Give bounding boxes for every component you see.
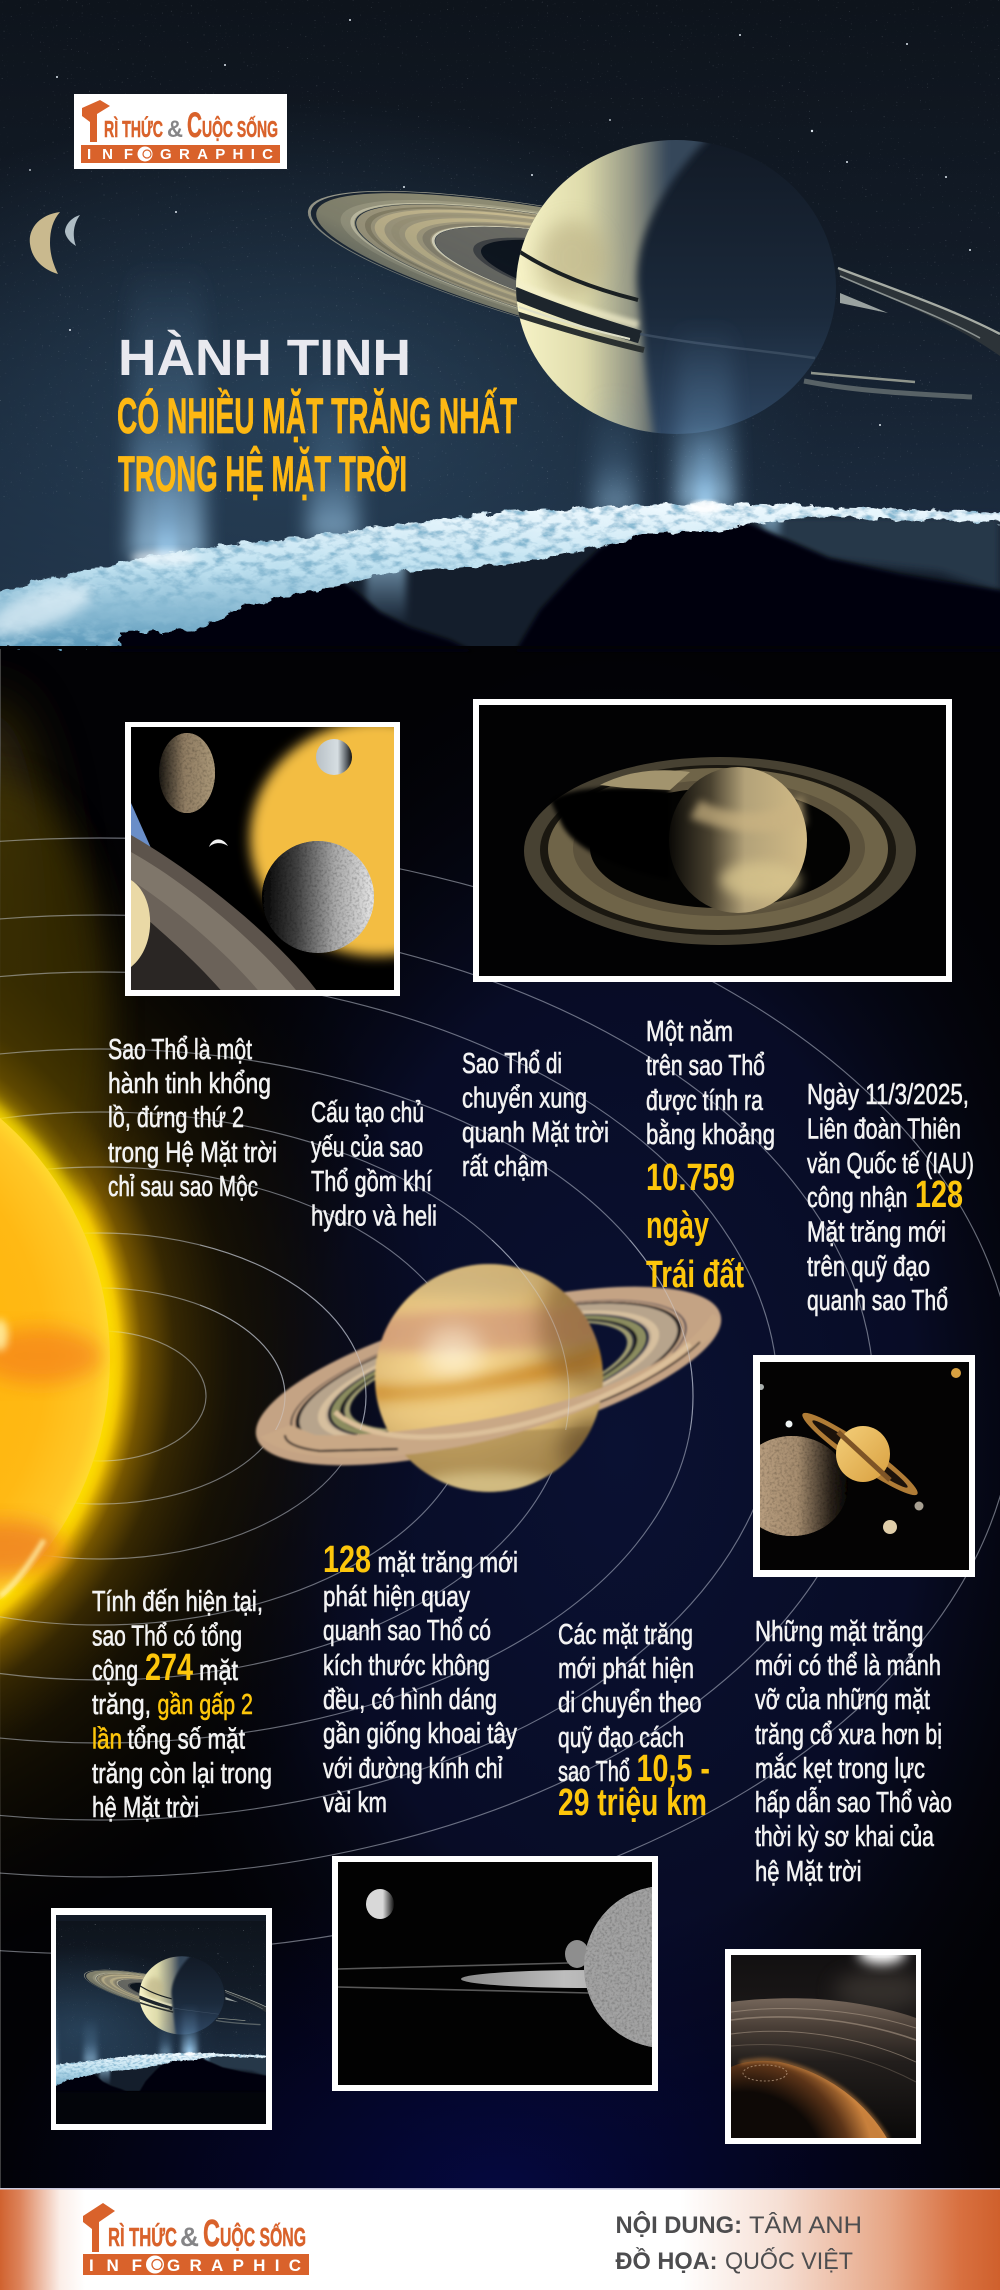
text: year length: Một năm xyxy=(646,1016,733,1048)
text: IAU recognition: Mặt trăng mới xyxy=(807,1216,946,1248)
header illustration: Saturn above icy moon xyxy=(0,0,1000,652)
text: total moons: trăng còn lại trong xyxy=(92,1758,272,1790)
text: total moons: gần gấp 2 xyxy=(158,1689,253,1721)
credits: TÂM ANH xyxy=(749,2212,862,2239)
text: total moons: cộng xyxy=(92,1655,138,1687)
text: origin of moons: mắc kẹt trong lực xyxy=(755,1753,925,1785)
text: IAU recognition: quanh sao Thổ xyxy=(807,1285,948,1317)
orbit lines overlapping Saturn xyxy=(200,1240,694,1430)
text: composition xyxy=(311,1097,437,1232)
logo: header xyxy=(74,94,287,169)
text: year length: 10.759 xyxy=(646,1157,735,1199)
text: irregular moons: vài km xyxy=(323,1787,387,1819)
text: orbit distance: 29 triệu km xyxy=(558,1782,707,1824)
text: slow orbit xyxy=(462,1048,609,1183)
text: total moons: tổng số mặt xyxy=(128,1724,245,1756)
text: total moons: hệ Mặt trời xyxy=(92,1792,199,1824)
text: year length: bằng khoảng xyxy=(646,1119,775,1151)
logo: footer xyxy=(83,2203,309,2275)
title: HÀNH TINH xyxy=(118,329,411,386)
central Saturn illustration xyxy=(258,1259,719,1500)
text: total moons: 274 xyxy=(145,1647,193,1689)
text: origin of moons: mới có thể là mảnh xyxy=(755,1650,941,1682)
logo: footer: & xyxy=(180,2222,199,2252)
text: Saturn giant planet: trong Hệ Mặt trời xyxy=(108,1137,277,1169)
dark silhouette of moon xyxy=(110,522,1000,652)
photo: Saturn over icy moon xyxy=(51,1908,272,2130)
Saturn planet with shadow terminator xyxy=(500,130,836,440)
text: IAU recognition: trên quỹ đạo xyxy=(807,1251,930,1283)
text: year length: ngày xyxy=(646,1205,709,1247)
text: origin of moons: thời kỳ sơ khai của xyxy=(755,1821,934,1853)
logo: footer: RÌ THỨC xyxy=(108,2222,177,2252)
text: year length: được tính ra xyxy=(646,1085,763,1117)
text: origin of moons: Những mặt trăng xyxy=(755,1616,924,1648)
text: Saturn giant planet xyxy=(108,1034,277,1203)
photo: moons and edge-on rings xyxy=(332,1856,658,2091)
text: slow orbit: rất chậm xyxy=(462,1151,548,1183)
text: composition: Thổ gồm khí xyxy=(311,1166,432,1198)
photo: Saturn with rings from above xyxy=(473,699,952,982)
icy limb surface xyxy=(0,503,1000,647)
text: total moons: trăng, xyxy=(92,1689,151,1721)
text: origin of moons xyxy=(755,1616,952,1888)
text: year length: Trái đất xyxy=(646,1254,744,1296)
ring right side fragments xyxy=(804,268,1000,397)
title: TRONG HỆ MẶT TRỜI xyxy=(118,446,407,502)
text: irregular moons: kích thước không xyxy=(323,1650,490,1682)
text: composition: yếu của sao xyxy=(311,1132,423,1164)
text: IAU recognition: 128 xyxy=(915,1174,963,1216)
text: Saturn giant planet: lồ, đứng thứ 2 xyxy=(108,1102,244,1134)
text: total moons xyxy=(92,1586,272,1824)
text: orbit distance xyxy=(558,1619,710,1824)
ring behind planet xyxy=(258,1259,719,1493)
text: origin of moons: hệ Mặt trời xyxy=(755,1856,862,1888)
text: orbit distance: 10,5 - xyxy=(636,1748,710,1790)
ring in front of planet xyxy=(260,1314,719,1458)
text: irregular moons: mặt trăng mới xyxy=(378,1547,518,1579)
text: irregular moons xyxy=(323,1539,518,1819)
photo: Saturn and moons montage xyxy=(736,1355,975,1577)
ring back half xyxy=(296,150,1000,440)
crescent moons xyxy=(30,212,80,274)
title: CÓ NHIỀU MẶT TRĂNG NHẤT xyxy=(117,388,517,444)
text: IAU recognition: công nhận xyxy=(807,1182,908,1214)
logo: header: GRAPHIC xyxy=(160,146,273,163)
text: IAU recognition xyxy=(807,1079,974,1317)
credits xyxy=(616,2211,862,2275)
text: origin of moons: vỡ của những mặt xyxy=(755,1684,930,1716)
planet body xyxy=(375,1264,603,1492)
text: orbit distance: di chuyển theo xyxy=(558,1687,702,1719)
logo: footer: UỘC SỐNG xyxy=(220,2222,306,2252)
text: total moons: lần xyxy=(92,1724,122,1756)
text: orbit distance: Các mặt trăng xyxy=(558,1619,693,1651)
text: orbit distance: quỹ đạo cách xyxy=(558,1722,684,1754)
text: origin of moons: trăng cổ xưa hơn bị xyxy=(755,1719,942,1751)
text: composition: Cấu tạo chủ xyxy=(311,1097,424,1129)
text: irregular moons: quanh sao Thổ có xyxy=(323,1615,491,1647)
orbit lines xyxy=(0,838,1000,1954)
text: irregular moons: phát hiện quay xyxy=(323,1581,471,1613)
logo: header: C xyxy=(187,106,202,145)
sun glow xyxy=(0,709,441,2009)
text: Saturn giant planet: chỉ sau sao Mộc xyxy=(108,1171,258,1203)
text: slow orbit: chuyển xung xyxy=(462,1082,587,1114)
text: Saturn giant planet: hành tinh khổng xyxy=(108,1068,271,1100)
plumes beneath limb xyxy=(328,515,780,626)
text: year length: trên sao Thổ xyxy=(646,1050,765,1082)
background: main dark space panel xyxy=(0,648,1000,2190)
logo: footer: C xyxy=(203,2213,220,2255)
photo: ringed orange planet xyxy=(725,1939,926,2144)
text: year length xyxy=(646,1016,775,1296)
credits: QUỐC VIỆT xyxy=(725,2247,853,2275)
logo: header: & xyxy=(167,116,183,143)
bright ice highlights xyxy=(0,501,721,646)
text: slow orbit: quanh Mặt trời xyxy=(462,1117,609,1149)
logo: header: UỘC SỐNG xyxy=(202,115,278,142)
credits: ĐỒ HỌA: xyxy=(616,2247,718,2275)
text: orbit distance: mới phát hiện xyxy=(558,1653,694,1685)
photo: moons and rings xyxy=(125,722,400,996)
title xyxy=(117,329,517,502)
credits: NỘI DUNG: xyxy=(616,2211,742,2239)
logo: header: INF xyxy=(87,146,133,163)
haze below the limb xyxy=(0,510,1000,648)
sun disc xyxy=(0,1031,119,1687)
text: orbit distance: sao Thổ xyxy=(558,1756,630,1788)
text: total moons: sao Thổ có tổng xyxy=(92,1620,242,1652)
text: irregular moons: với đường kính chỉ xyxy=(323,1753,503,1785)
text: irregular moons: đều, có hình dáng xyxy=(323,1684,497,1716)
text: irregular moons: 128 xyxy=(323,1539,371,1581)
text: composition: hydro và heli xyxy=(311,1200,437,1232)
logo: footer: GRAPHIC xyxy=(167,2256,301,2275)
text: total moons: Tính đến hiện tại, xyxy=(92,1586,263,1618)
text: total moons: mặt xyxy=(199,1655,238,1687)
footer band xyxy=(0,2188,1000,2290)
text: Saturn giant planet: Sao Thổ là một xyxy=(108,1034,252,1066)
logo: footer: INF xyxy=(89,2256,142,2275)
logo: header: RÌ THỨC xyxy=(104,115,163,142)
text: slow orbit: Sao Thổ di xyxy=(462,1048,562,1080)
text: irregular moons: gần giống khoai tây xyxy=(323,1718,518,1750)
plumes of water vapour xyxy=(130,260,733,560)
